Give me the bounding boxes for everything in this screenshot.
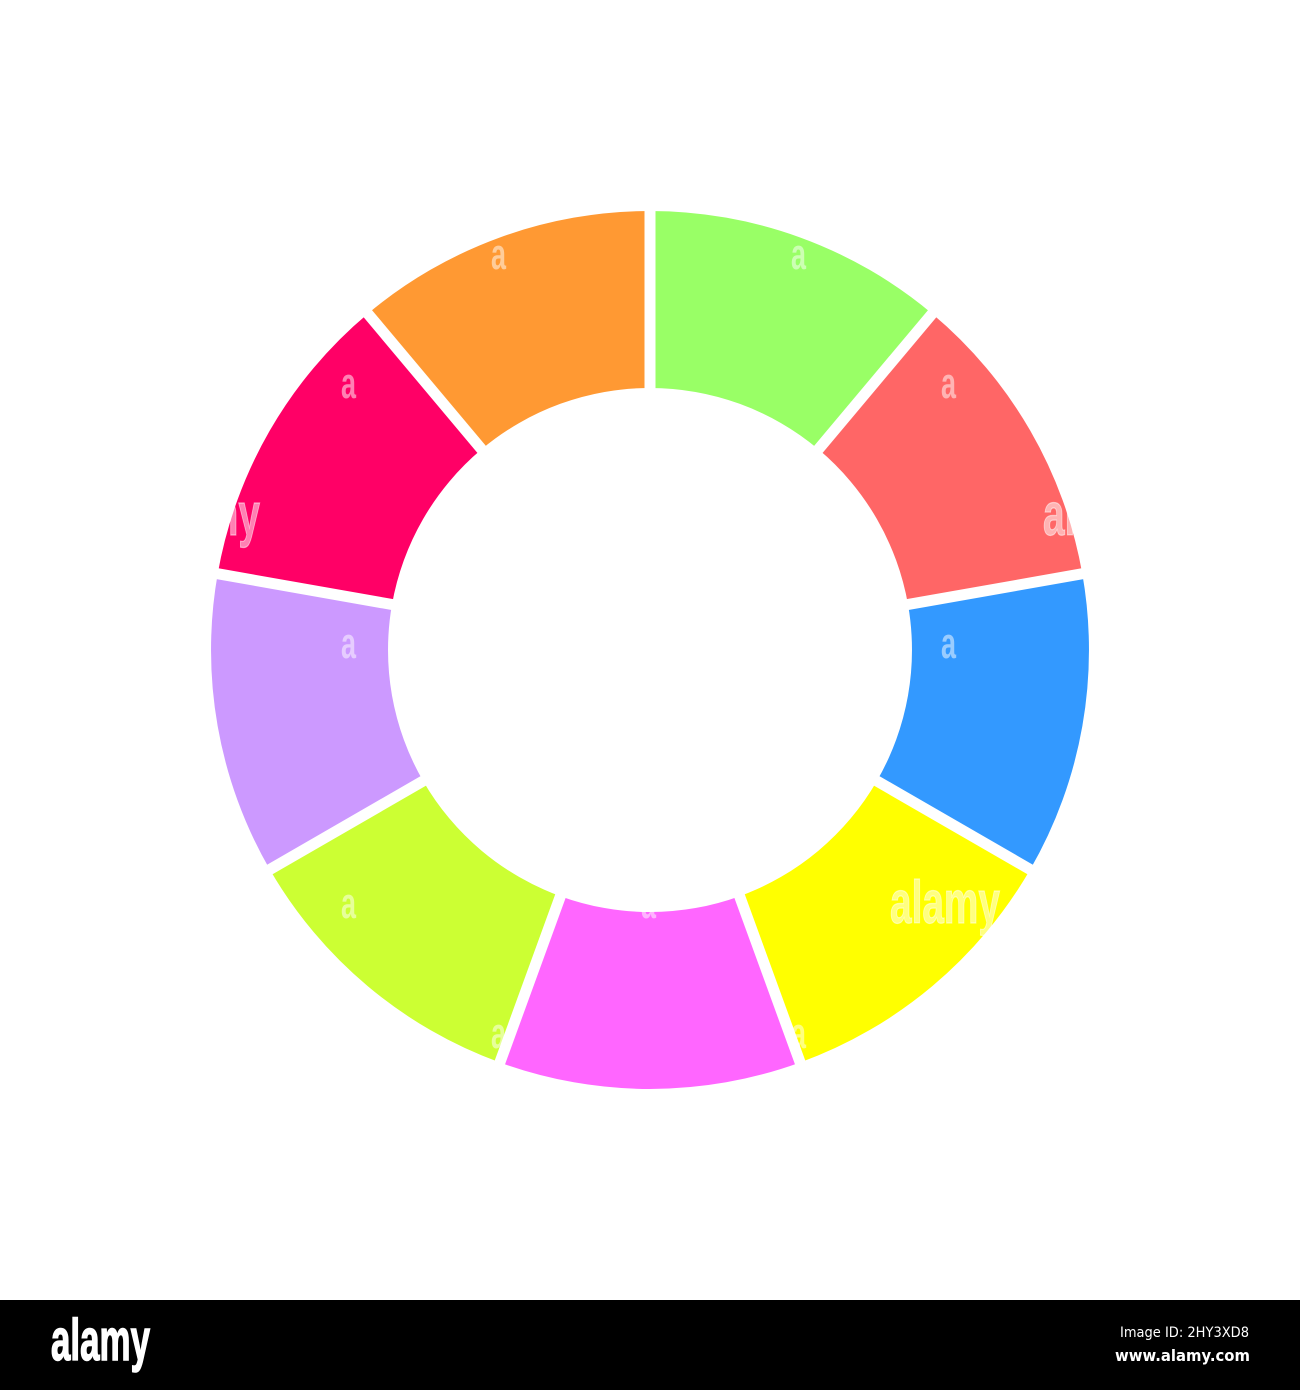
segment: salmon red bbox=[818, 314, 1082, 604]
watermarks: a bbox=[641, 879, 656, 928]
watermarks: a bbox=[791, 1009, 806, 1058]
watermarks: alamy bbox=[1043, 481, 1153, 548]
watermarks: a bbox=[791, 230, 806, 279]
segment: magenta bbox=[500, 896, 800, 1089]
donut chart bbox=[211, 205, 1089, 1089]
watermarks: a bbox=[341, 359, 356, 408]
footer bar bbox=[0, 1300, 1300, 1390]
segment: green bbox=[650, 211, 932, 449]
watermarks: alamy bbox=[890, 869, 1000, 936]
segment: yellow bbox=[740, 781, 1030, 1062]
segment: lavender bbox=[211, 574, 423, 870]
segment: blue bbox=[877, 574, 1089, 870]
watermarks: a bbox=[941, 359, 956, 408]
image id: Image ID: 2HY3XD8 bbox=[1120, 1325, 1249, 1341]
watermarks: alamy bbox=[150, 481, 260, 548]
segment: orange bbox=[368, 211, 650, 449]
segment: crimson bbox=[218, 314, 482, 604]
watermarks: a bbox=[341, 619, 356, 668]
watermarks: a bbox=[491, 1009, 506, 1058]
watermarks bbox=[150, 230, 1153, 1058]
watermarks: a bbox=[491, 230, 506, 279]
footer logo: alamy bbox=[51, 1308, 150, 1373]
segment: lime bbox=[270, 781, 560, 1062]
watermarks: a bbox=[941, 619, 956, 668]
website: www.alamy.com bbox=[1115, 1346, 1250, 1365]
watermarks: a bbox=[341, 879, 356, 928]
